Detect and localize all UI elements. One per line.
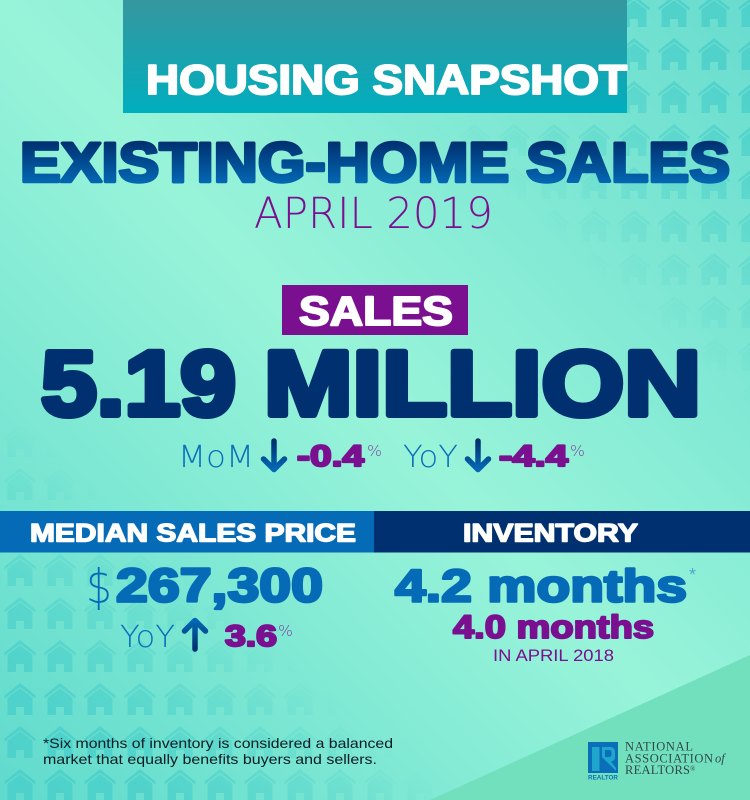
association name: ASSOCIATION	[625, 752, 713, 766]
median sales price heading	[0, 511, 374, 552]
median sales price heading: MEDIAN SALES PRICE	[30, 519, 356, 547]
footnote: market that equally benefits buyers and sellers.	[43, 751, 377, 767]
inventory heading	[374, 511, 750, 552]
year over year change	[403, 440, 585, 475]
median price change: YoY	[120, 620, 175, 655]
month over month change: %	[367, 442, 382, 460]
association name	[625, 740, 726, 777]
banner title: HOUSING SNAPSHOT	[146, 56, 627, 103]
sales label: SALES	[299, 288, 453, 334]
median price change: 3.6	[225, 620, 277, 653]
year over year change: %	[570, 442, 585, 460]
median price figure: $	[86, 560, 112, 615]
sales label	[282, 285, 468, 335]
month over month change: -0.4	[297, 440, 364, 473]
bottom right triangle	[430, 655, 750, 800]
inventory figure: *	[689, 565, 696, 585]
prior year inventory: 4.0 months	[453, 609, 654, 645]
sales figure: 5.19	[41, 333, 236, 435]
logo: National Association of Realtors	[588, 740, 726, 782]
sales figure	[41, 333, 701, 435]
footnote: *Six months of inventory is considered a balanced	[43, 735, 393, 751]
year over year change: YoY	[403, 440, 458, 475]
inventory heading: INVENTORY	[463, 519, 638, 547]
icon: down arrow	[264, 441, 284, 470]
prior year label: IN APRIL 2018	[493, 646, 614, 665]
month over month change	[178, 440, 382, 475]
association name: ®	[690, 765, 696, 773]
main title: EXISTING-HOME SALES	[20, 130, 730, 193]
icon: realtor block R: REALTOR	[588, 774, 618, 782]
background house pattern: lower left	[4, 472, 392, 800]
year over year change: -4.4	[499, 440, 568, 473]
median price change	[120, 620, 293, 655]
median price change: %	[278, 622, 293, 640]
icon: down arrow	[468, 441, 488, 470]
footnote	[43, 735, 393, 767]
month over month change: MoM	[178, 440, 254, 475]
association name: REALTORS	[625, 763, 690, 777]
sales figure: MILLION	[264, 333, 701, 435]
date subtitle: APRIL 2019	[254, 189, 493, 239]
background house pattern: top right	[500, 0, 750, 354]
association name: of	[715, 752, 726, 766]
header banner	[123, 0, 627, 113]
median price figure	[86, 559, 323, 615]
inventory figure: 4.2 months	[395, 561, 687, 612]
icon: up arrow	[184, 620, 206, 649]
median price figure: 267,300	[116, 559, 323, 612]
association name: NATIONAL	[625, 740, 693, 754]
